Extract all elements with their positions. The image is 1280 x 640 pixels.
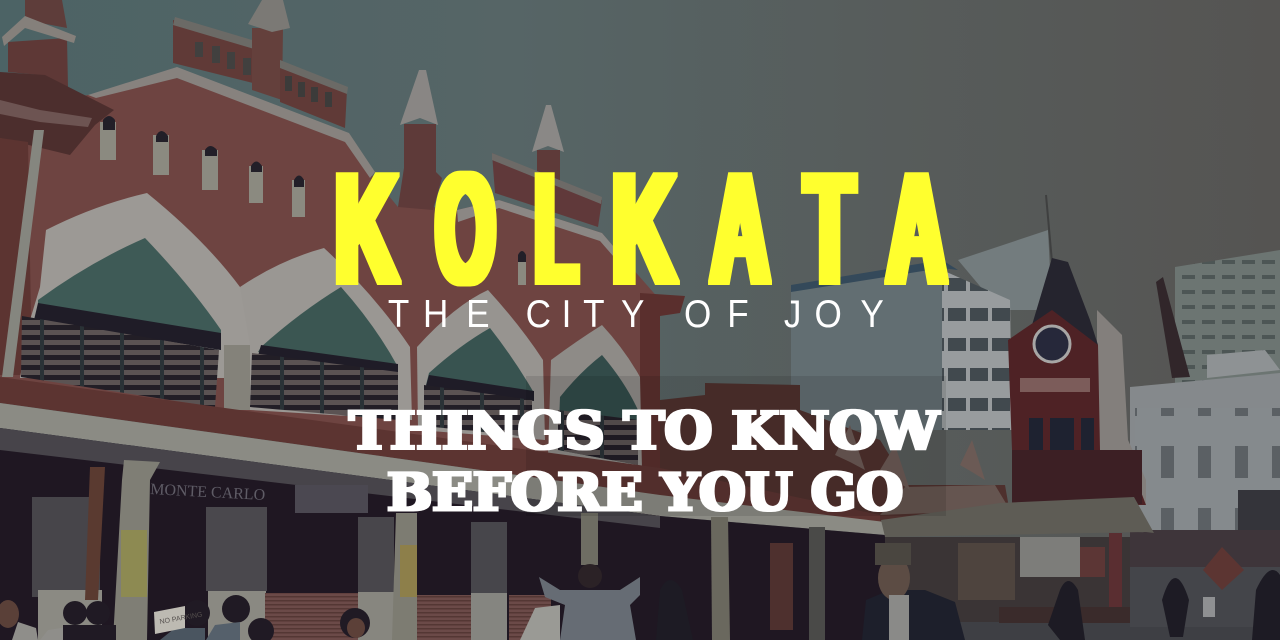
column two	[392, 513, 417, 640]
photo: right side buildings	[791, 195, 1280, 570]
title: KOLKATA: A	[711, 139, 769, 317]
upper arched windows	[100, 116, 526, 285]
photo: brick band and cream awning	[0, 377, 885, 640]
photo: covered walkway and pavement on right	[881, 497, 1280, 640]
pillar between arches	[224, 345, 254, 410]
second parapet	[280, 60, 348, 128]
rear roof trim	[457, 200, 631, 272]
column one	[113, 460, 160, 640]
column four	[711, 517, 730, 640]
title: KOLKATA: K	[335, 142, 398, 318]
title: KOLKATA: K	[612, 141, 676, 318]
photo: low brick buildings behind market	[660, 383, 1012, 530]
title: KOLKATA: T	[805, 139, 854, 317]
left tower	[2, 0, 76, 88]
clock tower	[1008, 195, 1146, 505]
title: KOLKATA: O	[436, 141, 495, 317]
title: KOLKATA	[335, 139, 946, 318]
rear parapet	[492, 153, 602, 227]
arch two	[240, 248, 412, 420]
shop sign text: MONTE CARLO	[150, 481, 266, 504]
man with hands behind head	[539, 564, 640, 640]
arch four	[548, 325, 642, 470]
heading line two: BEFORE YOU GO	[387, 462, 903, 524]
no parking sign: NO PARKING	[159, 612, 203, 626]
centre turret	[248, 0, 290, 100]
column three	[581, 513, 598, 565]
far right white building	[1130, 350, 1280, 570]
bearded man in foreground	[862, 543, 965, 640]
drainpipe	[2, 130, 44, 377]
office roof edge	[791, 260, 958, 292]
scaffolded tower	[1156, 250, 1280, 385]
spire one	[398, 70, 442, 210]
photo: shop front shutters and walls	[32, 460, 825, 640]
photo: market building brick wall	[0, 0, 685, 530]
translucent band behind subtitle	[526, 376, 946, 516]
office front wall	[791, 263, 942, 430]
brown post	[85, 467, 105, 600]
small gables	[835, 425, 985, 490]
white shirt onlooker	[520, 605, 560, 640]
column five	[809, 527, 825, 640]
title: KOLKATA: A	[887, 140, 946, 317]
left eaves pier	[0, 72, 114, 375]
right pier	[640, 293, 685, 530]
photo: white arches with green vents	[20, 193, 642, 470]
arch three	[417, 290, 545, 440]
heading: things to know before you go	[349, 401, 941, 524]
office side wall with windows	[942, 270, 1012, 430]
photo: crowd of people	[0, 543, 1280, 640]
subtitle: the city of joy: THE CITY OF JOY	[388, 291, 884, 335]
first parapet	[173, 17, 262, 85]
heading line one: THINGS TO KNOW	[349, 401, 941, 462]
no parking sign	[154, 606, 203, 634]
road sign	[1203, 547, 1244, 617]
arch one	[20, 193, 262, 410]
left group	[0, 595, 370, 640]
right side pedestrians	[656, 570, 1280, 640]
roof trim	[88, 67, 375, 178]
title: KOLKATA: L	[535, 141, 577, 317]
spire two	[532, 105, 564, 180]
upper office block	[958, 230, 1052, 310]
